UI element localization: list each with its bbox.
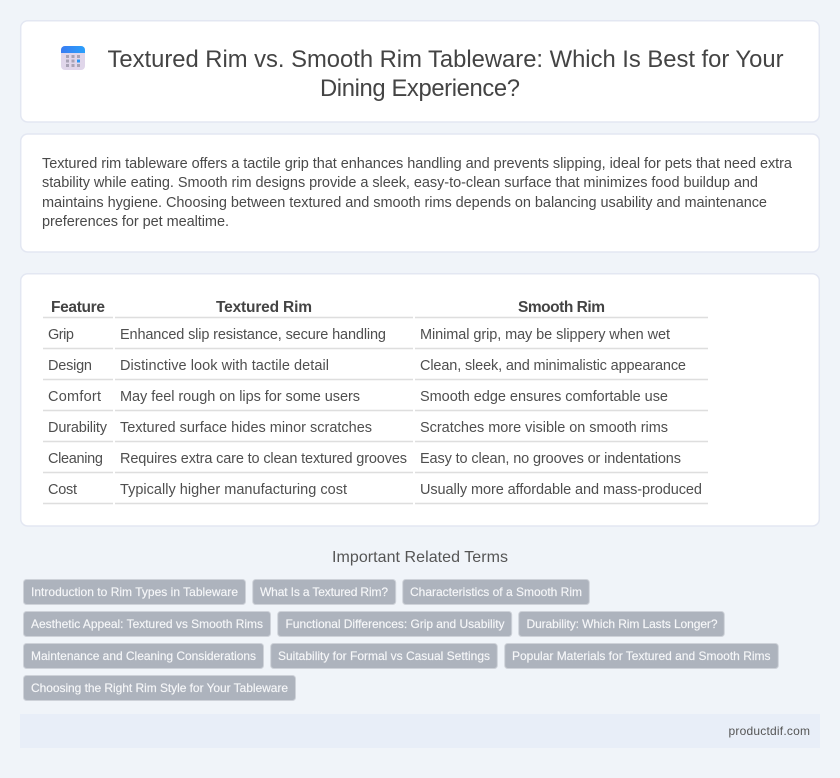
text block: intro: maintains hygiene. Choosing between textured and smooth rims depends on balancing usability and maintenance: [42, 195, 767, 211]
table row: grip: [43, 327, 708, 348]
table row: grip: Grip: [48, 327, 74, 343]
table row: cleaning: Cleaning: [48, 451, 103, 467]
table header: Smooth Rim: [518, 299, 605, 316]
table row: comfort: Smooth edge ensures comfortable use: [420, 389, 668, 405]
panel: intro paragraph: [21, 134, 819, 252]
text block: intro: stability while eating. Smooth rim designs provide a sleek, easy-to-clean surface that minimizes food buildup and: [42, 175, 758, 191]
tag: Characteristics of a Smooth Rim: [410, 585, 582, 599]
tag: Maintenance and Cleaning Considerations: [31, 649, 256, 663]
footer: [20, 714, 820, 748]
text block: intro: preferences for pet mealtime.: [42, 214, 229, 230]
tag: Introduction to Rim Types in Tableware: [31, 585, 238, 599]
tag: Choosing the Right Rim Style for Your Tableware: [31, 681, 288, 695]
tag: Functional Differences: Grip and Usability: [286, 617, 504, 631]
table row: cost: Cost: [48, 482, 77, 498]
tag: [403, 580, 589, 604]
title: Textured Rim vs. Smooth Rim Tableware: Which Is Best for Your: [108, 46, 784, 73]
tag: [505, 644, 778, 668]
icon: calendar: [61, 46, 85, 70]
tag: [24, 676, 296, 700]
table row: cleaning: Easy to clean, no grooves or indentations: [420, 451, 681, 467]
tag: Suitability for Formal vs Casual Settings: [278, 649, 490, 663]
table row: cleaning: Requires extra care to clean textured grooves: [120, 451, 407, 467]
tag: Popular Materials for Textured and Smooth Rims: [512, 649, 770, 663]
table row: cleaning: [43, 451, 708, 472]
table row: grip: Enhanced slip resistance, secure handling: [120, 327, 386, 343]
tag: [24, 644, 264, 668]
table header: Feature: [51, 299, 105, 316]
table row: cost: Typically higher manufacturing cost: [120, 482, 347, 498]
title: [108, 46, 784, 102]
table row: comfort: May feel rough on lips for some users: [120, 389, 360, 405]
tag: [278, 612, 512, 636]
tag: Aesthetic Appeal: Textured vs Smooth Rims: [31, 617, 263, 631]
footer: productdif.com: [728, 724, 810, 738]
panel: related term tags: [24, 580, 778, 700]
table row: cost: [43, 482, 708, 504]
table row: durability: Durability: [48, 420, 108, 436]
tag: [271, 644, 497, 668]
panel: title header: [21, 21, 819, 122]
table header: Textured Rim: [216, 299, 312, 316]
table row: design: Clean, sleek, and minimalistic appearance: [420, 358, 686, 374]
table row: cost: Usually more affordable and mass-produced: [420, 482, 702, 498]
table row: design: Distinctive look with tactile detail: [120, 358, 329, 374]
table row: comfort: Comfort: [48, 389, 101, 405]
table header: [43, 299, 708, 318]
table row: design: Design: [48, 358, 92, 374]
tag: [24, 580, 246, 604]
table row: durability: Scratches more visible on smooth rims: [420, 420, 668, 436]
tag: [253, 580, 396, 604]
table row: comfort: [43, 389, 708, 410]
heading: important related terms: Important Related Terms: [332, 549, 508, 566]
tag: Durability: Which Rim Lasts Longer?: [526, 617, 718, 631]
table row: durability: Textured surface hides minor scratches: [120, 420, 372, 436]
table row: durability: [43, 420, 708, 442]
tag: What Is a Textured Rim?: [260, 585, 388, 599]
title: Dining Experience?: [320, 75, 520, 102]
text block: intro: Textured rim tableware offers a tactile grip that enhances handling and prevents slipping, ideal for pets that need extra: [42, 156, 793, 172]
panel: comparison table: [21, 274, 819, 526]
table row: design: [43, 358, 708, 380]
tag: [519, 612, 724, 636]
table row: grip: Minimal grip, may be slippery when wet: [420, 327, 670, 343]
text block: intro: [42, 156, 793, 230]
tag: [24, 612, 270, 636]
